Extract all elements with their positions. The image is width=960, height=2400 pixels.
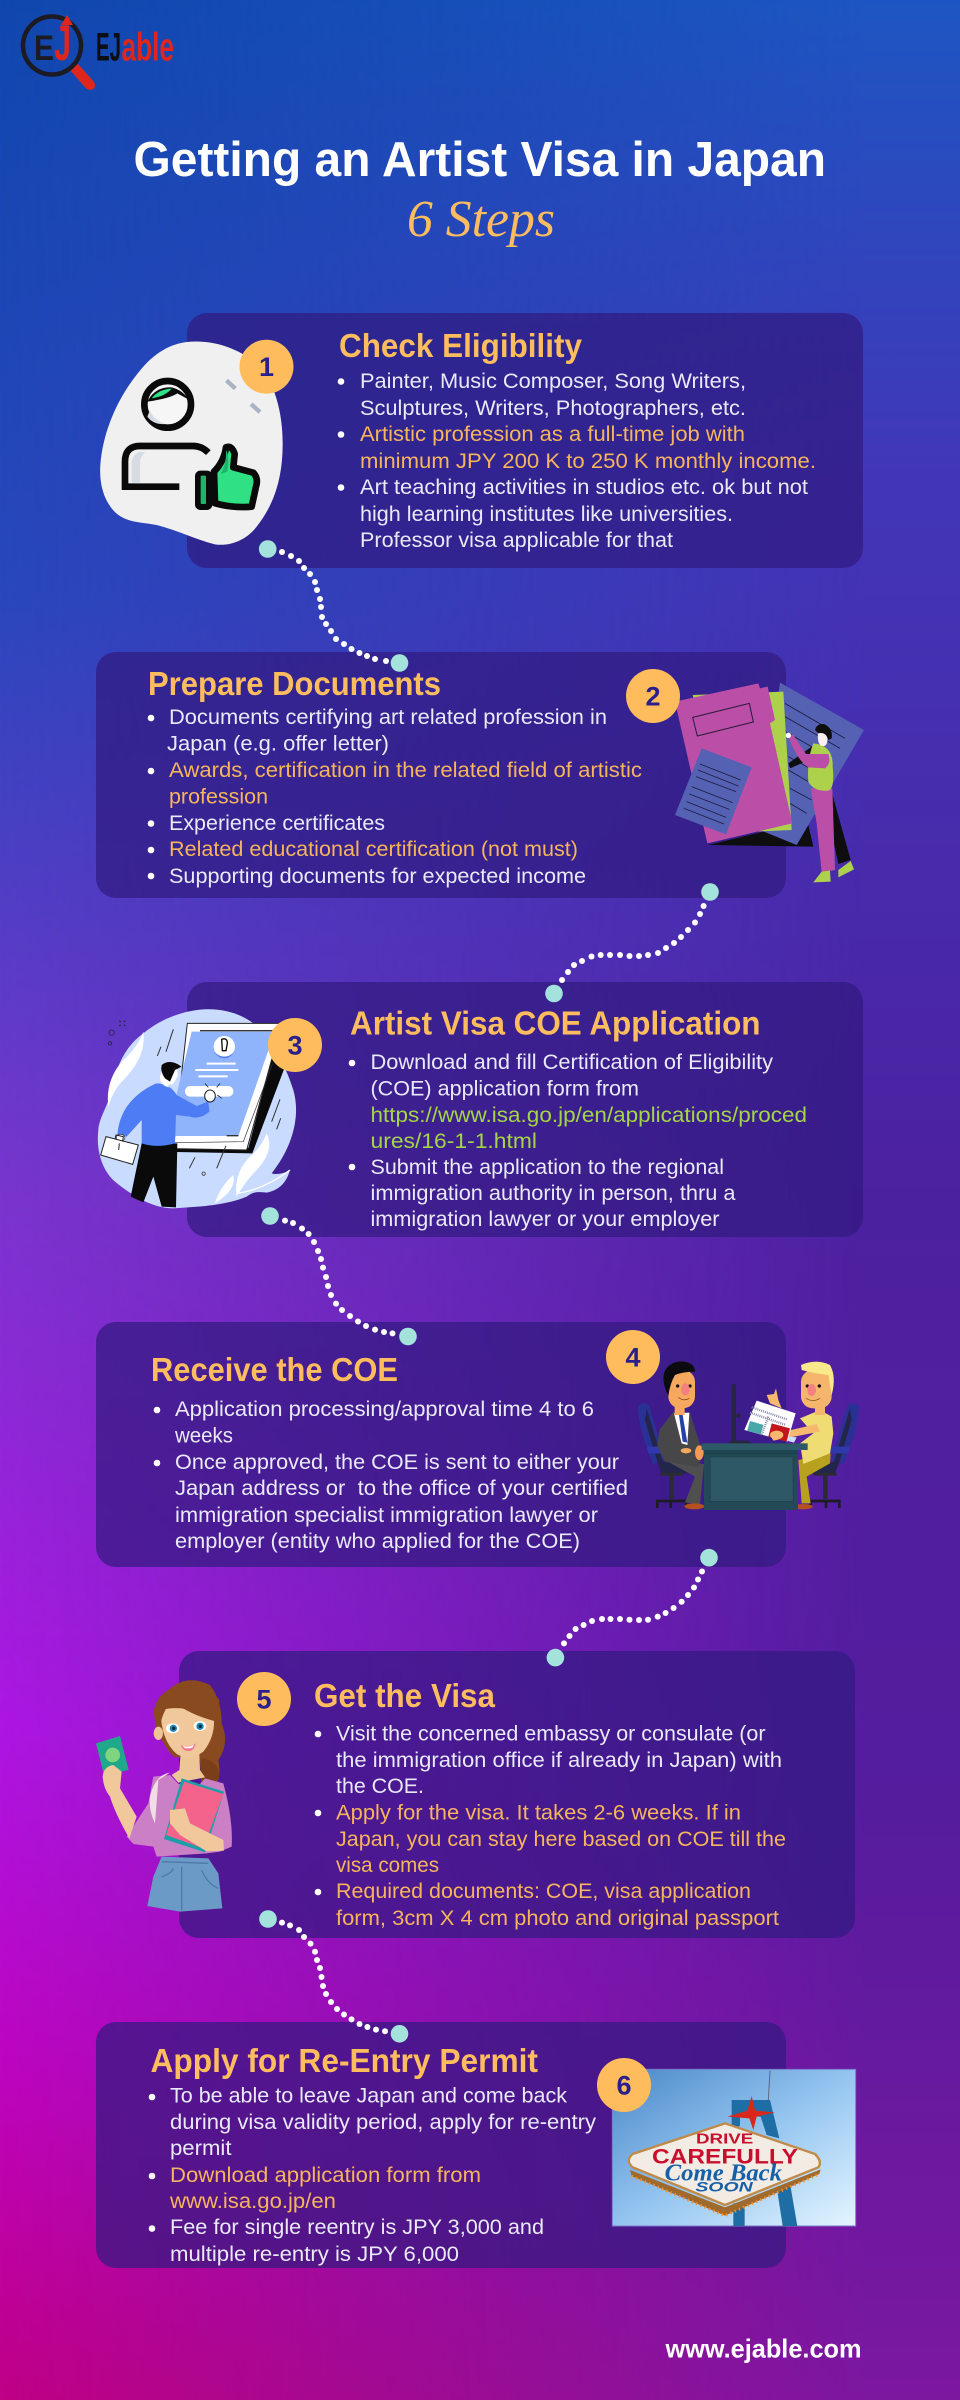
illustration: drive carefully sign photo: SOON xyxy=(695,2178,754,2194)
step 1: check eligibility xyxy=(100,313,863,568)
panel: step 5 card xyxy=(179,1651,855,1938)
text block: step 4 list xyxy=(154,1398,628,1553)
badge: number 1: 1 xyxy=(259,352,274,382)
text block: step 5 list: visa comes xyxy=(336,1854,439,1877)
badge: number 6: 6 xyxy=(616,2070,632,2100)
connector: step 4 to step 5 xyxy=(547,1549,718,1666)
badge: number 1 xyxy=(240,340,294,394)
text block: step 5 list: the immigration office if already in Japan) with xyxy=(336,1749,782,1772)
title: Getting an Artist Visa in Japan xyxy=(134,133,826,187)
text block: step 4 list: Application processing/approval time 4 to 6 xyxy=(175,1398,594,1421)
heading: step 6: Apply for Re-Entry Permit xyxy=(150,2042,538,2079)
text block: step 6 list xyxy=(149,2084,597,2266)
icon: magnifier with EJ letters: E xyxy=(34,29,54,68)
step 4: receive the COE xyxy=(96,1322,859,1567)
connector: step 5 to step 6 xyxy=(259,1910,408,2043)
text block: step 5 list xyxy=(315,1722,786,1930)
text block: step 1 list: minimum JPY 200 K to 250 K monthly income. xyxy=(360,450,816,473)
text block: step 2 list: Japan (e.g. offer letter) xyxy=(167,732,389,756)
text block: step 6 list: To be able to leave Japan and come back xyxy=(170,2084,568,2108)
text block: step 2 list: Supporting documents for expected income xyxy=(169,865,586,888)
panel: step 6 card xyxy=(96,2022,786,2268)
badge: number 4: 4 xyxy=(625,1342,641,1372)
step 2: prepare documents xyxy=(96,652,864,898)
badge: number 3: 3 xyxy=(287,1030,303,1060)
illustration: person with document folders xyxy=(675,683,864,882)
text block: step 2 list: Documents certifying art related profession in xyxy=(169,706,607,729)
text block: step 6 list: Download application form from xyxy=(170,2164,481,2187)
illustration: drive carefully sign photo: DRIVE xyxy=(696,2131,753,2148)
badge: number 6 xyxy=(597,2058,651,2112)
connector: step 2 to step 3 xyxy=(545,883,719,1002)
text block: step 3 list: ures/16-1-1.html xyxy=(370,1130,537,1153)
connector: step 1 to step 2 xyxy=(259,540,408,672)
step 5: get the visa xyxy=(96,1651,855,1938)
text block: step 2 list: Related educational certification (not must) xyxy=(169,838,578,861)
illustration: drive carefully sign photo: CAREFULLY xyxy=(652,2145,798,2169)
text block: step 6 list: multiple re-entry is JPY 6,000 xyxy=(170,2243,459,2266)
text block: step 5 list: Required documents: COE, visa application xyxy=(336,1880,751,1903)
badge: number 4 xyxy=(606,1330,660,1384)
text block: step 2 list xyxy=(148,706,642,888)
badge: number 5: 5 xyxy=(256,1684,272,1714)
text block: step 3 list xyxy=(349,1051,807,1231)
text block: step 3 list: immigration lawyer or your employer xyxy=(370,1208,720,1231)
step 3: COE application xyxy=(98,982,863,1237)
text block: step 3 list: (COE) application form from xyxy=(370,1078,639,1100)
badge: number 5 xyxy=(237,1672,291,1726)
logo wordmark: able xyxy=(122,26,174,70)
panel: step 3 card xyxy=(187,982,863,1237)
text block: step 4 list: weeks xyxy=(174,1424,233,1448)
text block: step 3 list: Submit the application to the regional xyxy=(370,1156,724,1179)
connector: step 3 to step 4 xyxy=(261,1207,417,1345)
text block: step 1 list: Artistic profession as a full-time job with xyxy=(360,423,745,446)
panel: step 1 card xyxy=(187,313,863,568)
text block: step 6 list: permit xyxy=(170,2137,232,2160)
text block: step 1 list xyxy=(338,370,816,552)
text block: step 5 list: form, 3cm X 4 cm photo and original passport xyxy=(336,1907,779,1930)
text block: step 4 list: Once approved, the COE is sent to either your xyxy=(175,1451,619,1474)
text block: step 4 list: immigration specialist immigration lawyer or xyxy=(175,1504,598,1527)
icon: person with thumbs up xyxy=(100,342,283,545)
text block: step 5 list: the COE. xyxy=(336,1775,424,1798)
text block: step 6 list: Fee for single reentry is JPY 3,000 and xyxy=(170,2216,544,2239)
text block: step 2 list: profession xyxy=(169,786,268,808)
text block: step 2 list: Awards, certification in the related field of artistic xyxy=(169,759,642,782)
illustration: woman holding passport and notebook xyxy=(96,1680,232,1912)
heading: step 3: Artist Visa COE Application xyxy=(350,1004,760,1042)
illustration: man at giant screen xyxy=(98,1009,296,1208)
panel: step 4 card xyxy=(96,1322,786,1567)
text block: step 5 list: Japan, you can stay here based on COE till the xyxy=(336,1828,786,1851)
text block: step 1 list: Professor visa applicable for that xyxy=(360,529,673,552)
badge: number 2 xyxy=(626,669,680,723)
step 6: re-entry permit xyxy=(96,2022,856,2268)
text block: step 4 list: employer (entity who applied for the COE) xyxy=(175,1530,580,1553)
website url: www.ejable.com xyxy=(665,2334,862,2364)
text block: step 1 list: Art teaching activities in studios etc. ok but not xyxy=(360,476,808,499)
text block: step 5 list: Visit the concerned embassy or consulate (or xyxy=(336,1722,766,1746)
icon: magnifier with EJ letters: J xyxy=(54,15,71,71)
text block: step 1 list: high learning institutes like universities. xyxy=(360,503,733,526)
logo wordmark: EJ xyxy=(96,26,121,70)
heading: step 4: Receive the COE xyxy=(151,1351,398,1388)
illustration: drive carefully sign photo xyxy=(612,2069,856,2226)
panel: step 2 card xyxy=(96,652,786,898)
text block: step 3 list: Download and fill Certification of Eligibility xyxy=(370,1051,774,1074)
text block: step 1 list: Painter, Music Composer, Song Writers, xyxy=(360,370,746,393)
heading: step 1: Check Eligibility xyxy=(339,327,583,364)
text block: step 1 list: Sculptures, Writers, Photographers, etc. xyxy=(360,397,746,420)
icon: magnifier with EJ letters xyxy=(23,15,95,90)
subtitle: 6 Steps xyxy=(407,191,555,248)
badge: number 3 xyxy=(268,1018,322,1072)
text block: step 5 list: Apply for the visa. It takes 2-6 weeks. If in xyxy=(336,1802,741,1824)
logo: EJable xyxy=(23,15,174,90)
text block: step 2 list: Experience certificates xyxy=(169,812,385,835)
badge: number 2: 2 xyxy=(645,682,661,712)
heading: step 5: Get the Visa xyxy=(314,1677,496,1714)
illustration: drive carefully sign photo: Come Back xyxy=(665,2160,783,2187)
logo wordmark xyxy=(96,26,174,70)
illustration: two men at a desk xyxy=(638,1361,859,1510)
text block: step 6 list: www.isa.go.jp/en xyxy=(169,2190,336,2213)
text block: step 4 list: Japan address or to the office of your certified xyxy=(175,1477,628,1500)
text block: step 3 list: https://www.isa.go.jp/en/applications/proced xyxy=(370,1104,807,1127)
text block: step 6 list: during visa validity period, apply for re-entry xyxy=(170,2111,597,2134)
text block: step 3 list: immigration authority in person, thru a xyxy=(370,1182,736,1205)
heading: step 2: Prepare Documents xyxy=(148,665,441,702)
